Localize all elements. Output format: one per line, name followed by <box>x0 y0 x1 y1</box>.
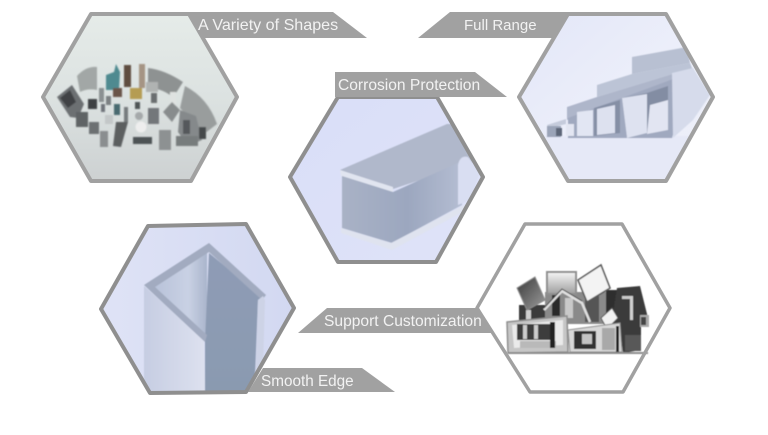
label: corrosion protection <box>335 72 507 97</box>
panel: a variety of shapes <box>40 10 367 185</box>
label: full range <box>418 12 570 38</box>
panel: support customization <box>298 224 670 392</box>
panel: smooth edge <box>98 220 395 400</box>
label: corrosion protection: Corrosion Protection <box>338 77 480 94</box>
hexagon frame <box>290 97 483 262</box>
hexagon frame <box>477 224 670 392</box>
label: full range: Full Range <box>464 17 537 34</box>
photo: aluminium tubes of increasing size <box>522 16 710 179</box>
label: a variety of shapes: A Variety of Shapes <box>198 16 338 34</box>
photo: aluminium U channel <box>104 226 292 391</box>
photo: aluminium H-beam end <box>292 99 480 260</box>
photo: stacked aluminium frames <box>507 265 649 354</box>
label: support customization: Support Customization <box>324 313 482 330</box>
panel: corrosion protection <box>285 72 507 267</box>
panel: full range <box>418 10 715 185</box>
label: smooth edge <box>248 368 395 392</box>
label: a variety of shapes <box>187 12 367 38</box>
hexagon frame <box>101 224 294 393</box>
label: smooth edge: Smooth Edge <box>261 373 354 390</box>
hexagon frame <box>519 14 713 181</box>
label: support customization <box>298 308 493 333</box>
photo: assorted aluminium profiles <box>46 16 234 179</box>
hexagon frame <box>43 14 237 181</box>
